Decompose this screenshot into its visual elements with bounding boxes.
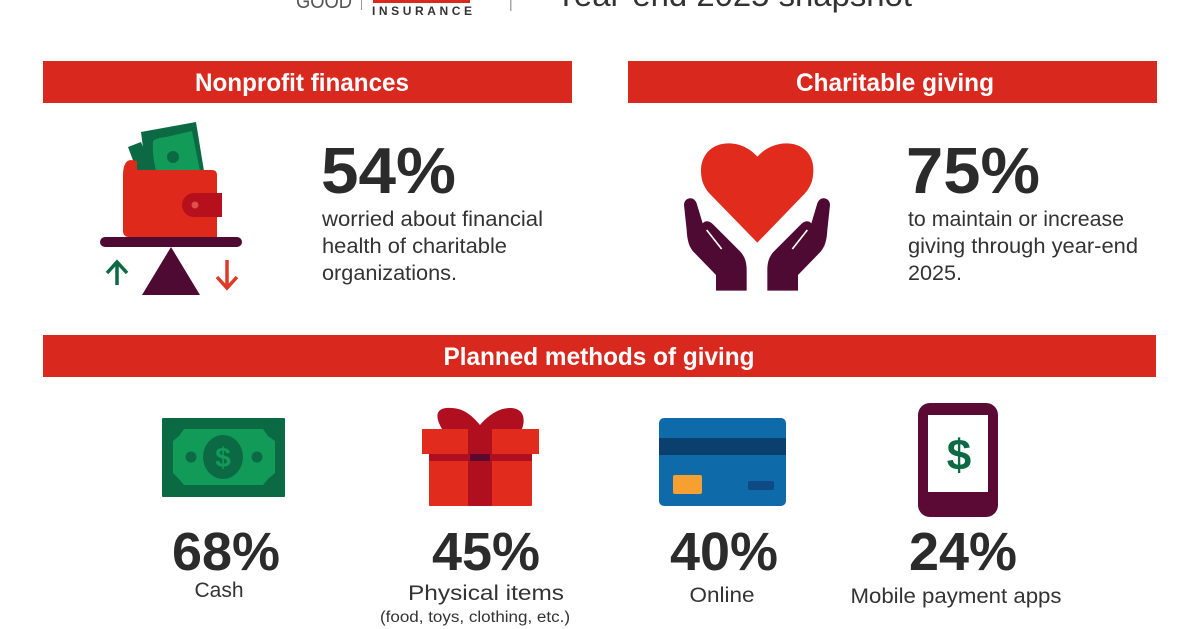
description: financial worry: health of charitable — [322, 235, 507, 258]
panel: planned methods of giving — [43, 335, 1156, 626]
stat: 75%: 75% — [906, 134, 1040, 207]
logo: INSURANCE — [372, 4, 472, 18]
description: maintain or increase giving: 2025. — [908, 262, 962, 285]
description: maintain or increase giving — [908, 208, 1138, 285]
label: physical items: Physical items — [408, 582, 564, 605]
method: online — [659, 418, 786, 607]
description: financial worry: organizations. — [322, 262, 457, 285]
heading: nonprofit finances — [43, 61, 572, 103]
heading: charitable giving — [628, 61, 1157, 103]
method: physical items — [380, 408, 570, 626]
label: mobile payment apps: Mobile payment apps — [850, 585, 1062, 608]
stat: 68%: 68% — [172, 522, 280, 582]
header logo and title — [296, 0, 912, 18]
icon: banknote — [162, 418, 285, 497]
icon: banknote: $ — [215, 442, 231, 473]
stat: 54%: 54% — [321, 134, 456, 207]
stat: 45%: 45% — [432, 522, 540, 582]
icon: phone with dollar — [918, 403, 998, 517]
icon: gift box — [422, 408, 539, 506]
description: maintain or increase giving: to maintain or increase — [908, 208, 1124, 231]
description: financial worry: worried about financial — [321, 208, 543, 231]
stat: 24%: 24% — [909, 522, 1017, 582]
description: financial worry — [321, 208, 543, 285]
label: online: Online — [690, 584, 754, 607]
label: cash: Cash — [194, 579, 244, 602]
icon: heart in hands — [684, 143, 830, 291]
panel: nonprofit finances — [43, 61, 572, 295]
icon: phone with dollar: $ — [947, 431, 971, 480]
logo — [296, 0, 512, 18]
heading: planned methods of giving: Planned methods of giving — [444, 343, 754, 371]
method: cash — [162, 418, 285, 602]
panel: charitable giving — [628, 61, 1157, 291]
label: physical items — [380, 582, 570, 626]
icon: credit card — [659, 418, 786, 506]
heading: charitable giving: Charitable giving — [796, 69, 994, 97]
icon: wallet on balance — [100, 122, 242, 295]
description: maintain or increase giving: giving through year-end — [908, 235, 1138, 258]
heading: planned methods of giving — [43, 335, 1156, 377]
label: physical items: (food, toys, clothing, etc.) — [380, 609, 570, 626]
heading: nonprofit finances: Nonprofit finances — [195, 69, 409, 97]
stat: 40%: 40% — [670, 522, 778, 582]
method: mobile payment apps — [850, 403, 1062, 608]
